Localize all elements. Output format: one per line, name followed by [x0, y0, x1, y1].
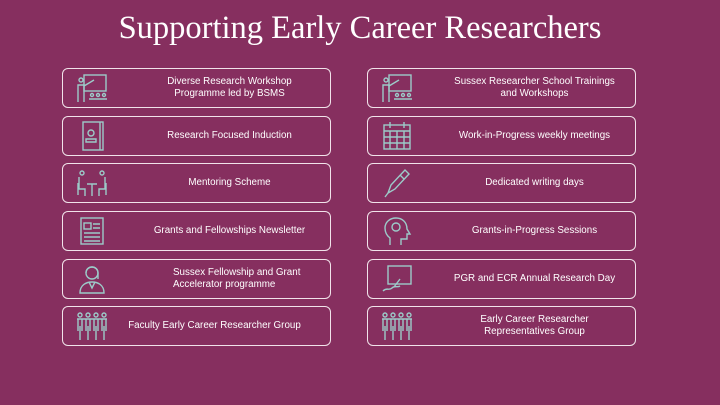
item: induction: Research Focused Induction [167, 130, 292, 141]
item: induction [62, 116, 331, 156]
item: WIP meetings: Work-in-Progress weekly meetings [459, 130, 610, 141]
item: GIP sessions: Grants-in-Progress Sessions [472, 225, 597, 236]
item: ECR reps [367, 306, 636, 346]
item: fellowship [62, 259, 331, 299]
item: mentoring: Mentoring Scheme [188, 177, 271, 188]
item: fellowship: Sussex Fellowship and Grant [173, 267, 300, 278]
item: GIP sessions [367, 211, 636, 251]
item: newsletter [62, 211, 331, 251]
item: mentoring [62, 163, 331, 203]
item: researcher school: and Workshops [501, 88, 568, 99]
item: annual day [367, 259, 636, 299]
item: ECR group [62, 306, 331, 346]
item: researcher school: Sussex Researcher School Trainings [454, 76, 615, 87]
item: writing days [367, 163, 636, 203]
item: fellowship: Accelerator programme [173, 279, 275, 290]
item: workshop [62, 68, 331, 108]
item: writing days: Dedicated writing days [485, 177, 584, 188]
item: newsletter: Grants and Fellowships Newsletter [154, 225, 305, 236]
item: workshop: Diverse Research Workshop [167, 76, 292, 87]
item: workshop: Programme led by BSMS [174, 88, 285, 99]
item: ECR reps: Early Career Researcher [480, 314, 589, 325]
item: researcher school [367, 68, 636, 108]
item: annual day: PGR and ECR Annual Research Day [454, 273, 615, 284]
item: WIP meetings [367, 116, 636, 156]
item: ECR reps: Representatives Group [484, 326, 585, 337]
title: Supporting Early Career Researchers [119, 10, 601, 46]
item: ECR group: Faculty Early Career Researcher Group [128, 320, 301, 331]
